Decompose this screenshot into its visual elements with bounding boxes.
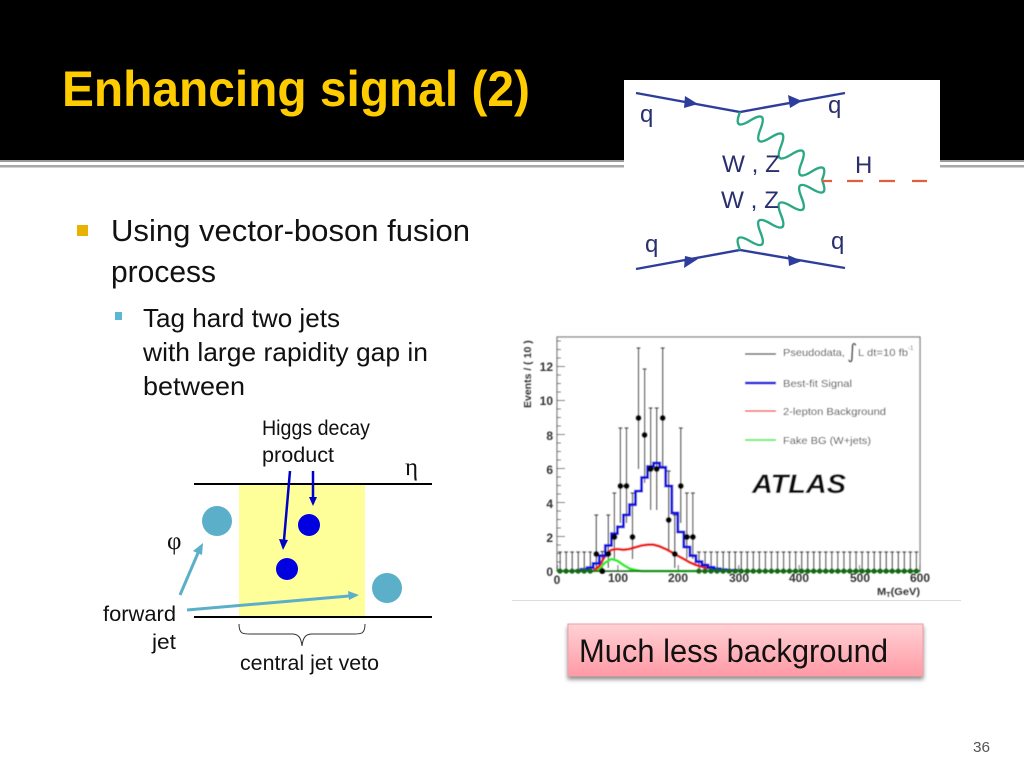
legend: ∫ [847, 339, 857, 363]
legend: 2-lepton Background [783, 406, 886, 418]
header bar [0, 0, 1024, 168]
sub-bullet text: jets: with large rapidity gap in [142, 337, 428, 367]
sub-bullet marker: blue square [115, 312, 122, 320]
x axis labels: 600 [910, 571, 930, 585]
axis ticks [557, 337, 920, 571]
y axis labels: 8 [546, 429, 553, 443]
label: Higgs decay product: product [262, 444, 334, 467]
y axis labels [540, 360, 553, 579]
diagram background [624, 80, 940, 280]
x axis labels: 300 [729, 571, 749, 585]
y axis labels: 0 [546, 565, 553, 579]
legend: -1 [908, 346, 914, 352]
W and Z boson wavy lines [738, 112, 824, 250]
red 2-lepton background curve [593, 545, 738, 571]
label: phi: φ [167, 528, 181, 555]
sub-bullet text: jets [142, 303, 428, 401]
legend: Best-fit Signal [783, 378, 852, 390]
light blue arrows [180, 543, 359, 610]
plot frame [557, 337, 920, 571]
callout: Much less background: Much less background [579, 633, 888, 669]
Feynman labels: q [831, 228, 844, 255]
x axis labels: 400 [789, 571, 809, 585]
Feynman labels [640, 92, 872, 258]
y axis labels: 10 [540, 394, 553, 408]
x axis title: M [877, 586, 886, 598]
x axis labels [554, 571, 930, 587]
ATLAS label: ATLAS [751, 469, 846, 499]
x axis labels: 0 [554, 573, 561, 587]
brace [239, 624, 365, 646]
Feynman labels: H [855, 152, 872, 179]
bullet text: vector-boson fusion: process [111, 254, 216, 289]
sub-bullet text: jets: Tag hard two jets [143, 303, 340, 333]
bullet marker: yellow square [77, 225, 88, 236]
quark lines [636, 93, 845, 269]
forward jets [202, 506, 402, 603]
bullet text: vector-boson fusion: Using vector-boson fusion [111, 213, 470, 248]
Feynman diagram [624, 80, 940, 280]
label: forward jet [103, 603, 176, 654]
Feynman labels: W , Z [721, 187, 779, 214]
x axis labels: 100 [608, 571, 628, 585]
y axis labels: 4 [546, 497, 553, 511]
y axis labels: 12 [540, 360, 553, 374]
data points [593, 415, 696, 574]
blue signal histogram [575, 463, 738, 571]
bullet text: vector-boson fusion [111, 213, 470, 289]
legend: Pseudodata, [783, 347, 845, 359]
rapidity diagram [103, 417, 432, 675]
central veto region [239, 484, 365, 617]
legend: L dt=10 fb [858, 347, 908, 359]
x axis title: T [886, 592, 891, 599]
quark arrowheads [684, 95, 802, 268]
x axis labels: 200 [668, 571, 688, 585]
label: forward jet: jet [151, 631, 176, 654]
legend: Fake BG (W+jets) [783, 435, 871, 447]
sub-bullet text: jets: between [143, 371, 245, 401]
legend [745, 339, 914, 447]
Feynman labels: q [645, 231, 658, 258]
y axis title: Events / ( 10 ) [522, 340, 534, 408]
bullet list [77, 213, 470, 401]
Feynman labels: W , Z [722, 151, 780, 178]
label: Higgs decay product: Higgs decay [262, 417, 370, 440]
x axis labels: 500 [850, 571, 870, 585]
Feynman labels: q [640, 101, 653, 128]
baseline and zero-count points [557, 570, 920, 572]
Feynman labels: q [828, 92, 841, 119]
Higgs decay products [276, 514, 320, 580]
label: Higgs decay product [262, 417, 370, 467]
label: central jet veto: central jet veto [240, 652, 379, 675]
chart bottom rule [512, 600, 961, 602]
green fake background curve [557, 559, 920, 571]
Higgs dashed line [822, 180, 927, 182]
detector boundary lines [194, 484, 432, 617]
x axis title: (GeV) [891, 586, 920, 598]
blue arrows [279, 471, 317, 550]
error bars [558, 348, 919, 571]
page number: 36 [973, 740, 990, 756]
callout: Much less background [568, 624, 923, 676]
y axis labels: 6 [546, 463, 553, 477]
y axis labels: 2 [546, 531, 553, 545]
label: forward jet: forward [103, 603, 176, 626]
label: eta: η [405, 454, 418, 481]
ATLAS chart [522, 337, 930, 599]
title: Enhancing signal (2) [62, 61, 530, 117]
